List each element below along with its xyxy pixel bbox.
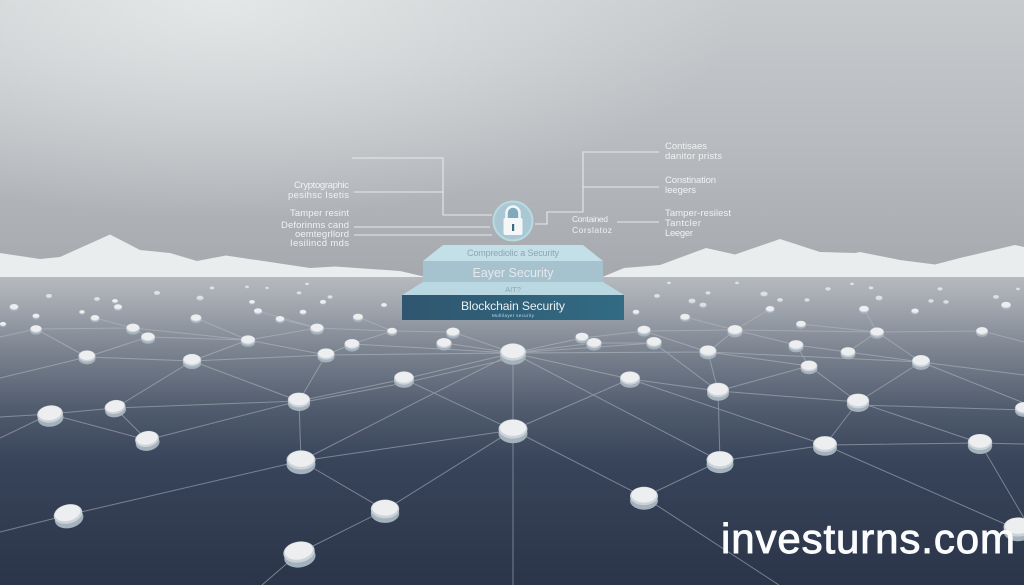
labels: left column — [281, 180, 349, 249]
labels: right column: danitor prists — [665, 151, 722, 162]
labels: left column: Deforinms cand — [281, 220, 349, 231]
labels: right column: Tantcler — [665, 218, 701, 229]
labels: left column: Tamper resint — [290, 208, 349, 219]
labels: right column — [572, 141, 731, 239]
tier 2: layer security: Eayer Security — [472, 266, 554, 280]
icon: padlock badge — [494, 202, 532, 240]
tier 3: lower surface — [402, 282, 624, 295]
labels: left column: Cryptographic — [294, 180, 349, 191]
network ground plane — [0, 277, 1024, 585]
labels: right column: Contisaes — [665, 141, 707, 152]
network links — [0, 309, 1024, 585]
layered security pyramid — [402, 245, 624, 320]
labels: left column: oemtegrllord — [295, 229, 349, 240]
tier 2: layer security — [423, 261, 603, 282]
labels: right column: Tamper-resilest — [665, 208, 731, 219]
labels: right column: Leeger — [665, 228, 693, 239]
tier 4: blockchain security base: Blockchain Security — [461, 299, 566, 313]
watermark: investurns.com: investurns.com — [721, 515, 1015, 562]
labels: right column: Corslatoz — [572, 225, 612, 235]
network nodes — [0, 282, 1024, 570]
tier 3: lower surface: AIT? — [505, 285, 521, 294]
labels: right column: Constination — [665, 175, 716, 186]
connector lines: left — [352, 158, 492, 235]
labels: right column: leegers — [665, 185, 696, 196]
mountains on horizon — [0, 234, 1024, 278]
tier 1: top surface — [423, 245, 603, 261]
connector lines: right — [535, 152, 659, 224]
tier 1: top surface: Comprediolic a Security — [467, 248, 560, 258]
tier 4: blockchain security base: Multilayer security — [492, 313, 535, 318]
labels: left column: pesihsc Isetis — [288, 190, 349, 201]
sky background — [0, 0, 1024, 280]
labels: right column: Contained — [572, 214, 608, 224]
labels: left column: Iesilincd mds — [290, 238, 349, 249]
tier 4: blockchain security base — [402, 295, 624, 320]
